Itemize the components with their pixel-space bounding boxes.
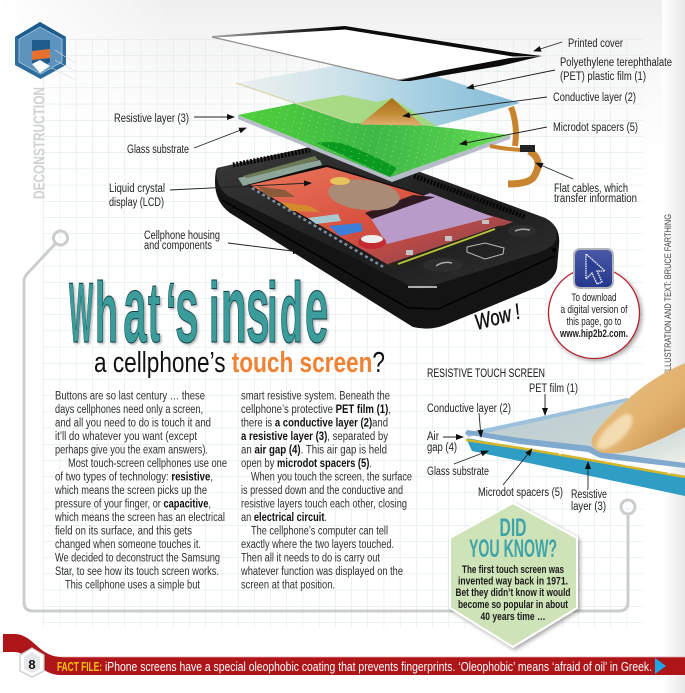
clock widget	[327, 176, 401, 214]
body text: left column: days cellphones need only a screen,	[55, 404, 203, 416]
callout: digital download	[548, 249, 640, 358]
body text: right column: screen at that position.	[241, 580, 335, 592]
body text: right column: whatever function was displayed on the	[240, 566, 403, 578]
title: s	[175, 255, 199, 363]
callout: did you know: become so popular in about	[458, 599, 568, 611]
label: housing: Cellphone housing	[144, 230, 220, 242]
body text: left column	[54, 390, 227, 592]
label: printed cover	[534, 38, 623, 51]
handwritten note: wow: Wow !	[472, 299, 523, 335]
callout: did you know: DID	[500, 514, 526, 542]
callout: digital download: To download	[572, 292, 616, 304]
flat cables	[490, 107, 538, 184]
diagram label: air gap: gap (4)	[427, 442, 457, 454]
label: flat cables: Flat cables, which	[554, 183, 628, 195]
callout: did you know: The first touch screen was	[462, 564, 564, 576]
glass layer	[466, 438, 685, 496]
body text: right column: an electrical circuit.	[241, 512, 327, 524]
body text: left column: Star, to see how its touch screen works.	[55, 566, 219, 578]
callout: did you know: 40 years time …	[480, 611, 546, 623]
diagram label: conductive layer	[427, 403, 511, 437]
callout: did you know: YOU KNOW?	[469, 535, 557, 563]
label: microdot spacers	[460, 122, 638, 144]
body text: right column: cellphone’s protective PET film (1),	[241, 404, 391, 416]
callout: digital download: www.hip2b2.com.	[559, 328, 628, 340]
diagram label: microdot spacers: Microdot spacers (5)	[478, 487, 563, 499]
title: t	[148, 266, 160, 360]
title	[69, 255, 328, 363]
app icons	[257, 186, 295, 197]
hardware buttons	[467, 243, 504, 259]
body text: right column: open by microdot spacers (5).	[241, 458, 372, 470]
title: i	[267, 266, 277, 360]
label: flat cables: transfer information	[554, 193, 637, 205]
body text: left column: perhaps give you the exam answers).	[55, 444, 208, 456]
title: e	[305, 255, 328, 363]
body text: right column: an air gap (4). This air gap is held	[241, 444, 387, 456]
label: glass substrate: Glass substrate	[127, 144, 189, 156]
page number badge: 8	[28, 657, 36, 672]
diagram label: conductive layer: Conductive layer (2)	[427, 403, 511, 415]
label: PET film	[467, 57, 672, 88]
diagram label: resistive layer	[571, 462, 607, 513]
upper film	[465, 399, 685, 466]
body text: right column: is pressed down and the conductive and	[241, 485, 403, 497]
label: LCD: display (LCD)	[109, 197, 164, 209]
callout: did you know	[450, 503, 577, 647]
fingernail	[596, 414, 632, 449]
section label: deconstruction: DECONSTRUCTION	[32, 87, 48, 199]
body text: right column: Then all it needs to do is carry out	[241, 552, 381, 564]
label: flat cables	[536, 163, 637, 205]
printed cover	[211, 27, 542, 80]
label: LCD	[109, 183, 311, 209]
label: conductive layer: Conductive layer (2)	[553, 92, 636, 104]
body text: right column: there is a conductive layer (2)and	[241, 418, 388, 430]
body text: left column: field on its surface, and this gets	[55, 526, 192, 538]
title: s	[246, 255, 269, 363]
body text: left column: changed when someone touches it.	[55, 539, 201, 551]
glass substrate	[238, 115, 510, 182]
callout: digital download: this page, go to	[566, 316, 622, 328]
label: resistive layer: Resistive layer (3)	[114, 113, 189, 125]
page number badge	[20, 648, 44, 677]
title: a	[123, 255, 147, 363]
diagram label: PET film	[529, 383, 578, 415]
body text: right column: exactly where the two layers touched.	[241, 539, 394, 551]
diagram label: glass substrate: Glass substrate	[427, 466, 489, 478]
diagram label: resistive layer: Resistive	[571, 489, 607, 501]
body text: left column: of two types of technology: resistive,	[55, 472, 213, 484]
label: housing	[144, 230, 300, 252]
icon: deconstruction hexagon	[15, 22, 75, 80]
title: h	[95, 266, 118, 360]
label: LCD: Liquid crystal	[109, 183, 165, 195]
callout: digital download: a digital version of	[560, 304, 628, 316]
arrow: next page	[655, 658, 666, 674]
title: W	[69, 266, 93, 361]
internal components	[238, 160, 322, 186]
body text: right column: When you touch the screen, the surface	[251, 472, 412, 484]
exploded phone illustration	[211, 26, 559, 329]
body text: right column: resistive layers touch each other, closing	[241, 498, 407, 510]
green resistive layer	[238, 103, 510, 177]
body text: left column: This cellphone uses a simple but	[65, 580, 201, 592]
credit line: ILLUSTRATION AND TEXT: BRUCE FARTHING	[663, 214, 674, 373]
menu icons	[406, 220, 489, 255]
diagram label: PET film: PET film (1)	[529, 383, 578, 395]
body text: right column: The cellphone’s computer can tell	[251, 526, 388, 538]
conductive bump	[360, 98, 423, 126]
callout: did you know: Bet they didn’t know it would	[456, 587, 570, 599]
label: PET film: (PET) plastic film (1)	[560, 71, 646, 83]
label: microdot spacers: Microdot spacers (5)	[553, 122, 638, 134]
diagram label: glass substrate	[427, 451, 489, 478]
footer: fact file banner: FACT FILE:	[57, 660, 102, 674]
body text: left column: pressure of your finger, or capacitive,	[55, 498, 211, 510]
diagram label: air gap	[427, 431, 463, 454]
finger	[591, 363, 685, 453]
body text: left column: We decided to deconstruct the Samsung	[55, 552, 220, 564]
body text: left column: which means the screen picks up the	[54, 485, 207, 497]
footer: fact file banner	[3, 634, 685, 675]
microdots	[466, 437, 670, 474]
title: d	[280, 266, 303, 360]
phone body	[215, 147, 559, 329]
label: glass substrate	[127, 128, 246, 156]
body text: left column: it’ll do whatever you want (except	[55, 431, 198, 443]
label: printed cover: Printed cover	[568, 38, 623, 50]
body text: left column: Buttons are so last century … these	[55, 390, 205, 402]
title: n	[221, 255, 247, 363]
diagram label: resistive layer: layer (3)	[571, 501, 606, 513]
subtitle: a cellphone’s touch screen?	[94, 347, 385, 379]
icon: cursor button	[574, 249, 613, 288]
body text: right column	[240, 390, 412, 592]
resistive layer cross-section diagram	[465, 363, 685, 496]
body text: left column: Most touch-screen cellphones use one	[68, 458, 227, 470]
heading: resistive touch screen: RESISTIVE TOUCH SCREEN	[427, 366, 545, 380]
body text: right column: a resistive layer (3), separated by	[241, 431, 388, 443]
diagram label: microdot spacers	[478, 449, 563, 499]
body text: left column: which means the screen has an electrical	[54, 512, 225, 524]
label: housing: and components	[144, 240, 212, 252]
body text: right column: smart resistive system. Beneath the	[241, 390, 390, 402]
body text: left column: and all you need to do is touch it and	[55, 418, 211, 430]
title: i	[209, 266, 219, 360]
title: ‘	[166, 266, 176, 360]
PET plastic film	[236, 58, 520, 126]
diagram label: air gap: Air	[427, 431, 439, 443]
callout: did you know: invented way back in 1971.	[458, 576, 568, 588]
connector line with end circles	[24, 231, 635, 611]
screen	[240, 165, 513, 267]
label: conductive layer	[403, 92, 636, 116]
